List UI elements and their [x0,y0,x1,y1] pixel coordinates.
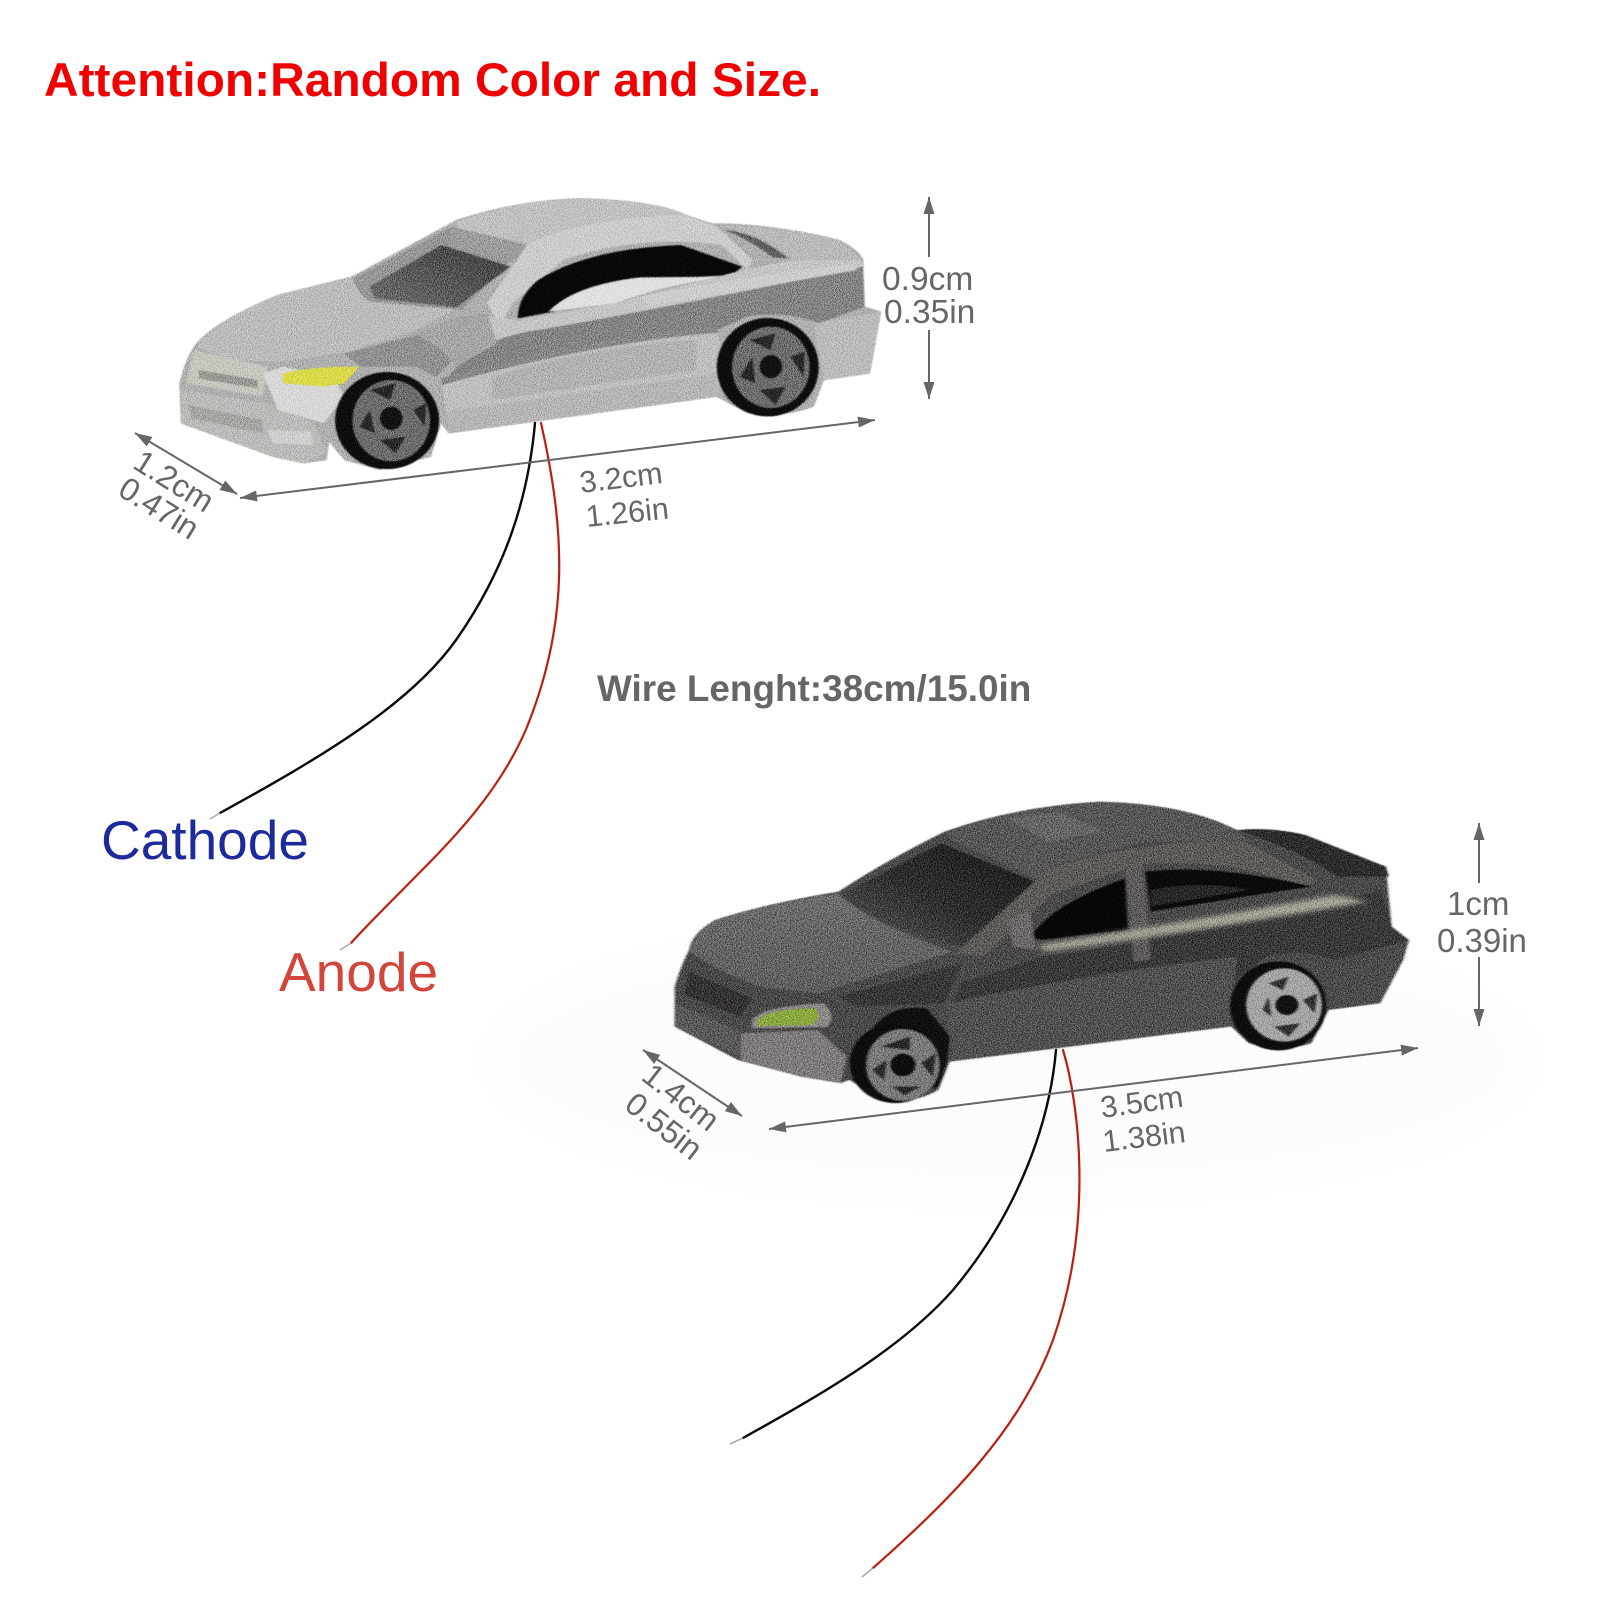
wires: silver car anode (red) [340,423,559,950]
label: wire length: Wire Lenght:38cm/15.0in [597,668,1031,709]
dark car photo [674,802,1409,1103]
label: silver car length: 1.26in [584,491,670,534]
arrow: dark car height [1478,823,1480,1026]
label: silver car width [112,443,220,546]
label: silver car width: 1.2cm [128,443,220,519]
wires: silver car cathode (black) [210,423,535,819]
label: silver car length [578,456,670,534]
label: silver car height: 0.9cm [882,261,973,298]
label: dark car width [619,1056,726,1167]
arrow: silver car length [240,420,875,498]
wires: dark car cathode (black) [730,1050,1056,1444]
title: Attention:Random Color and Size. [44,54,821,107]
label: cathode: Cathode [101,809,309,871]
label: silver car height: 0.35in [884,294,975,331]
label: dark car length: 3.5cm [1098,1080,1185,1125]
label: dark car height [1437,885,1527,959]
label: silver car height [882,261,975,331]
faint shadow behind dark car [490,930,1530,1190]
label: dark car length: 1.38in [1101,1115,1187,1159]
label: silver car length: 3.2cm [578,456,664,500]
label: dark car width: 1.4cm [636,1056,726,1138]
arrow: dark car width [643,1050,742,1116]
label: dark car height: 1cm [1447,885,1509,922]
wires: dark car anode (red) [862,1050,1079,1577]
arrow: silver car width [135,433,237,494]
arrow: dark car length [769,1048,1418,1129]
label: dark car height: 0.39in [1437,922,1527,959]
label: dark car width: 0.55in [619,1085,709,1167]
label: anode: Anode [279,941,438,1003]
label: silver car width: 0.47in [112,470,206,546]
silver car photo [179,198,881,470]
label: dark car length [1098,1080,1187,1159]
arrow: silver car height [928,197,930,399]
